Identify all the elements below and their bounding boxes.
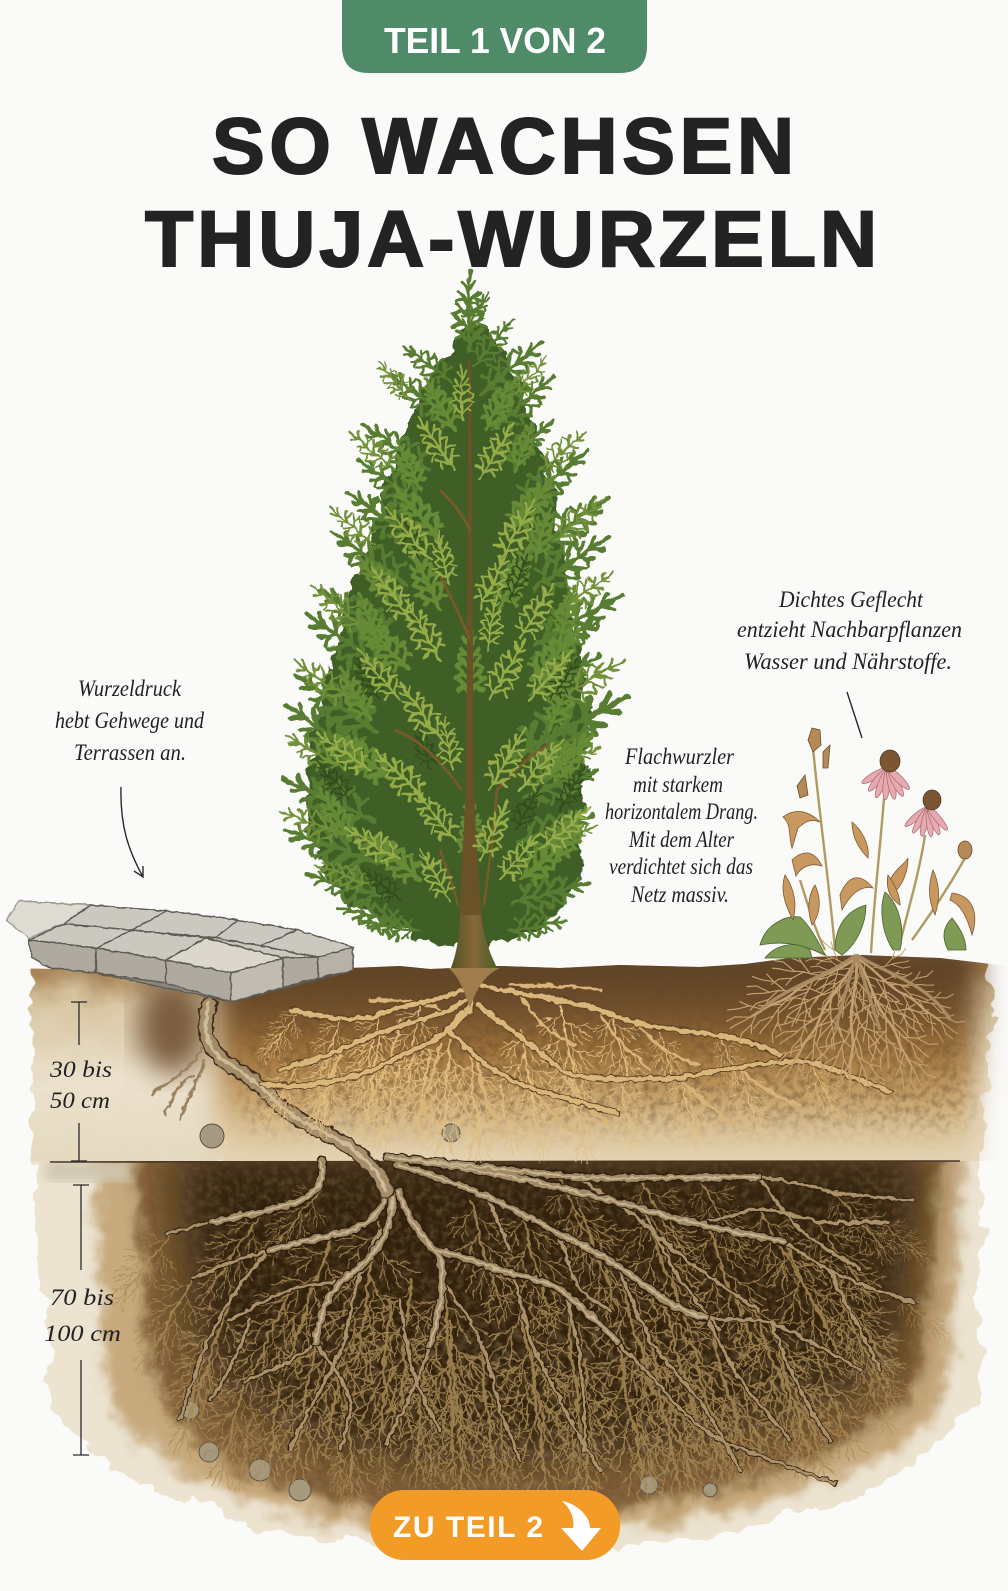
paving stones [6,901,353,1002]
coneflower 2 [903,790,950,837]
upper root system [150,968,890,1169]
paver base [19,901,353,1002]
plant root system [708,918,979,1114]
annotation: Flachwurzler: horizontalem Drang. [605,799,758,824]
tree [273,272,641,1008]
fine roots upper [244,999,854,1169]
dried leaves [783,811,975,935]
annotation: Wurzeldruck: Wurzeldruck [78,676,182,701]
annotation: Wurzeldruck: Terrassen an. [74,740,186,765]
title: SO WACHSEN [212,101,794,190]
fine roots lower [91,1163,958,1510]
title [145,101,877,283]
plants [760,728,975,958]
badge: Teil 1 von 2 [342,0,647,73]
tree root flare [448,968,500,1008]
inner mid-green sprigs [309,372,603,891]
tree foliage front [309,365,599,906]
annotation: Dichtes Geflecht: entzieht Nachbarpflanzen [737,617,962,642]
arrow: to paving stones [121,787,143,877]
icon: curved down arrow [561,1501,601,1551]
lower root system [91,1004,958,1510]
upper soil layer [28,955,1002,1161]
depth marker: 30 bis 50 cm [49,1002,112,1161]
green leaves [760,892,966,958]
outer sprig tips [274,350,633,897]
lower soil layer [35,1150,985,1552]
dark foliage accents [310,509,594,908]
depth marker: 70 bis 100 cm [44,1185,121,1455]
annotation: Flachwurzler: Flachwurzler [624,744,735,769]
annotation: Flachwurzler: verdichtet sich das [609,854,753,879]
annotation: Flachwurzler: Mit dem Alter [628,827,735,852]
annotation: Flachwurzler: Netz massiv. [630,882,729,907]
tree foliage back [273,272,641,945]
badge: Teil 1 von 2: TEIL 1 VON 2 [384,20,606,61]
annotation: Dichtes Geflecht: Wasser und Nährstoffe. [744,649,952,674]
outer sprigs [273,272,641,943]
side root near pavers [150,1045,205,1120]
annotation: Wurzeldruck [55,676,204,765]
paver top faces [6,901,353,973]
seed heads [797,728,972,859]
annotation: Flachwurzler: mit starkem [633,772,723,797]
coneflower 1 [860,750,912,800]
soil cross-section [30,940,992,1552]
inner light sprigs [309,365,599,906]
tree trunk [395,360,548,968]
stones [181,1124,717,1501]
button: Zu Teil 2: ZU TEIL 2 [393,1511,543,1544]
button: Zu Teil 2 [370,1490,620,1560]
annotation: Dichtes Geflecht [737,587,962,674]
arrow: to coneflowers [847,692,862,738]
annotation: Wurzeldruck: hebt Gehwege und [55,708,204,733]
annotation: Dichtes Geflecht: Dichtes Geflecht [778,587,924,612]
depth marker: 30 bis 50 cm: 50 cm [50,1088,110,1113]
paver side faces [29,940,353,1002]
depth marker: 30 bis 50 cm: 30 bis [49,1057,112,1082]
annotation: Flachwurzler [605,744,758,907]
depth marker: 70 bis 100 cm: 70 bis [50,1285,114,1310]
title: THUJA-WURZELN [145,194,877,283]
soil horizon line [50,1161,960,1162]
plant stems [800,748,965,953]
depth marker: 70 bis 100 cm: 100 cm [44,1321,121,1346]
